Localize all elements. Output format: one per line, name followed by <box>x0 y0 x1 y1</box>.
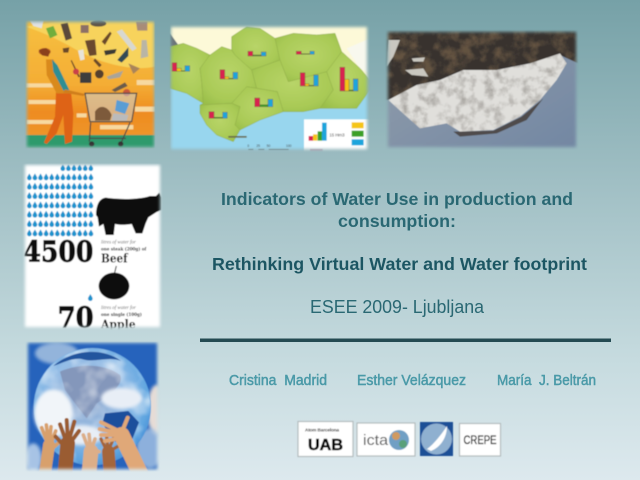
icon: falling goods <box>30 20 148 96</box>
author names: Esther Velázquez <box>357 372 466 389</box>
panel: satellite photo of greenhouses on the Almeria coast <box>385 30 578 150</box>
author names: María J. Beltrán <box>497 372 596 389</box>
author names: Cristina Madrid <box>229 372 327 389</box>
title second line: consumption: <box>338 211 456 231</box>
logo: CREPE <box>460 424 500 456</box>
icon: cow silhouette <box>96 193 162 235</box>
hand: pale <box>83 434 99 473</box>
land: provinces <box>170 27 370 142</box>
bars: provinces <box>172 51 358 118</box>
scale bar <box>247 144 292 150</box>
big number 70: 70 <box>58 299 94 334</box>
panel: water footprint infographic <box>22 163 163 334</box>
logo: UAB: Atom Barcelona <box>305 428 339 432</box>
scale bar: 25 <box>256 144 260 148</box>
scale bar: 50 <box>267 144 271 148</box>
panel: map of Andalusia with bar charts <box>170 23 370 153</box>
label: apple: one single (100g) <box>101 312 142 317</box>
land base <box>170 27 370 142</box>
conference line: ESEE 2009- Ljubljana <box>310 297 485 317</box>
label: apple: Apple <box>100 317 136 331</box>
shopping cart <box>85 93 137 147</box>
subtitle: Rethinking Virtual Water and Water footprint <box>212 254 587 274</box>
author names <box>229 372 596 389</box>
logos row <box>298 422 500 456</box>
label: apple: litres of water for <box>101 306 136 311</box>
man <box>39 48 85 144</box>
label: apple <box>100 306 142 331</box>
logo: ICTA <box>357 423 415 456</box>
big number 4500: 4500 <box>23 234 93 269</box>
scale bar: 100 <box>286 144 292 148</box>
label: beef: one steak (200g) of <box>101 247 148 252</box>
globe <box>34 348 151 465</box>
label: beef: litres of water for <box>101 241 136 246</box>
map legend: 15 Hm3 <box>329 132 345 137</box>
hand: right, peach <box>100 418 140 473</box>
label: beef: Beef <box>101 252 128 266</box>
panel: consumer with shopping cart illustration <box>25 20 155 148</box>
hand: brown <box>101 437 119 473</box>
icon: apple silhouette <box>99 266 129 299</box>
logo: blue round emblem <box>420 422 453 456</box>
label: beef <box>101 241 148 266</box>
hand: left, fair <box>42 425 59 473</box>
greenhouses <box>388 53 567 132</box>
logo: UAB: UAB <box>308 437 343 454</box>
scale bar: 0 <box>247 144 249 148</box>
logo: UAB <box>298 422 353 456</box>
icon: single water drop <box>88 294 93 301</box>
hand: dark <box>56 420 79 473</box>
icon: water drops <box>27 164 93 236</box>
map legend <box>304 119 370 153</box>
title: Indicators of Water Use in production and <box>221 189 573 209</box>
logo: CREPE: CREPE <box>464 433 496 447</box>
hands <box>42 418 140 473</box>
logo: ICTA: icta <box>363 432 389 449</box>
coast shadow <box>453 98 543 137</box>
panel: hands holding up the globe <box>25 342 166 473</box>
